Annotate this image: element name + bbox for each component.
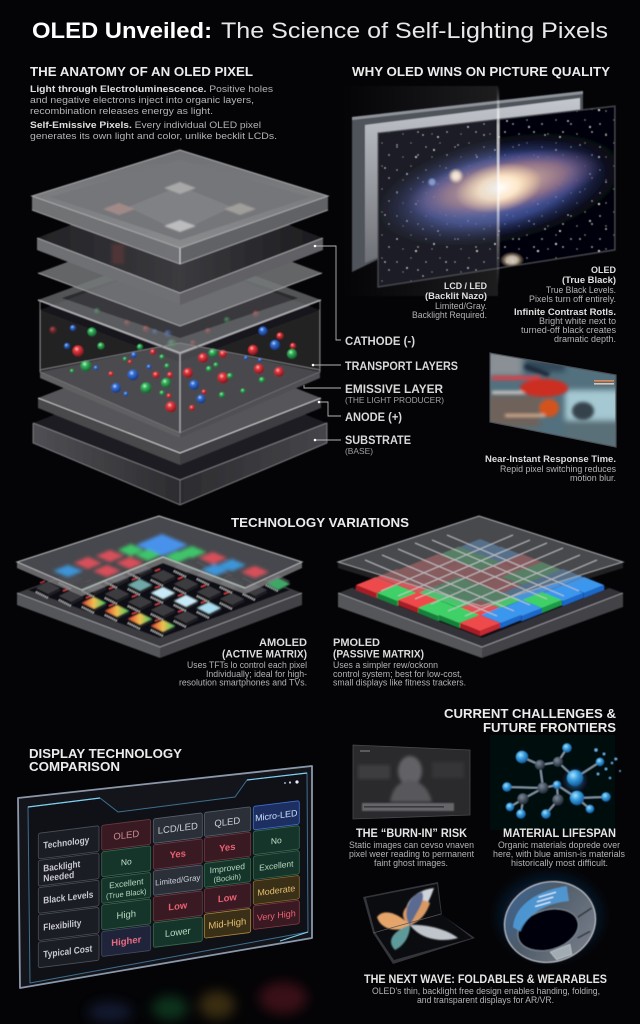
text block: OLED true black: turned-off black creates (521, 325, 616, 335)
text block: LCD / LED: Limited/Gray. (435, 301, 487, 311)
layer: anode (38, 343, 321, 465)
text block: OLED true black: OLED (591, 265, 616, 276)
column OLED: No (121, 856, 132, 867)
column OLED: Higher (111, 934, 142, 949)
back LCD frame (352, 91, 583, 272)
diagram: OLED pixel layer stack (32, 150, 328, 505)
text block: AMOLED: Individually; ideal for high- (206, 669, 307, 679)
PMOLED pixel grid (356, 539, 604, 636)
text block: material lifespan: historically most difficult. (511, 858, 608, 868)
diagram: AMOLED stack (17, 516, 302, 658)
text block: anatomy description: and negative electrons inject into organic layers, (30, 95, 254, 105)
text block: anatomy description: recombination releases energy as light. (30, 106, 213, 116)
column OLED: (True Black) (106, 887, 147, 901)
text block: OLED true black (514, 265, 616, 344)
text block: LCD / LED: (Backlit Nazo) (425, 291, 487, 302)
layer: top glass encapsulation (32, 150, 328, 264)
heading: challenges: FUTURE FRONTIERS (483, 720, 616, 735)
row label text (43, 834, 93, 961)
panel: LCD vs OLED galaxy displays (340, 86, 632, 296)
image: molecule (490, 735, 621, 830)
text block: burn-in risk: pixel weer reading to permanent (349, 849, 474, 859)
title: The Science of Self-Lighting Pixels (221, 18, 608, 43)
column Micro-LED: Moderate (257, 883, 295, 898)
text block: AMOLED: resolution smartphones and TVs. (179, 678, 307, 688)
row label text: Technology (43, 835, 90, 852)
glass pixels (103, 182, 256, 232)
text block: burn-in risk: faint ghost images. (374, 858, 448, 868)
layer: substrate (33, 366, 327, 505)
diagram: PMOLED stack (338, 516, 623, 658)
column QLED: Yes (219, 842, 235, 855)
column LCD/LED: Yes (170, 848, 186, 861)
text block: material lifespan: MATERIAL LIFESPAN (503, 826, 616, 840)
PMOLED glass plate (338, 516, 623, 612)
text block: AMOLED (179, 637, 307, 688)
title (32, 18, 608, 43)
row label text: Backlight (43, 859, 81, 875)
layer: cathode (37, 183, 323, 305)
layer: transport (38, 220, 322, 326)
column OLED: OLED (113, 829, 139, 843)
text block: LCD / LED: Backlight Required. (412, 310, 487, 320)
layer labels (345, 334, 458, 456)
text block: LCD / LED: LCD / LED (444, 281, 487, 292)
text block: OLED true black: Bright white next to (539, 316, 616, 326)
column QLED: (Bockih) (214, 872, 242, 884)
image: burn-in screen (353, 745, 470, 819)
text block: OLED true black: True Black Levels. (546, 285, 616, 295)
text block: anatomy description: Light through Electroluminescence. Positive holes (30, 84, 274, 94)
heading: comparison (29, 746, 182, 774)
text block: material lifespan: Organic materials doprede over (498, 840, 620, 850)
text block: response time: Near-Instant Response Time. (485, 454, 616, 465)
text block: PMOLED: PMOLED (333, 637, 380, 649)
text block: PMOLED: small displays like fitness trackers. (333, 678, 466, 688)
text block: AMOLED: (ACTIVE MATRIX) (222, 648, 307, 660)
text block: response time (485, 454, 616, 483)
text block: OLED true black: Pixels turn off entirely. (529, 294, 616, 304)
column QLED: Improved (210, 861, 245, 875)
text block: burn-in risk: Static images can cevso vnaven (349, 840, 474, 850)
text block: response time: Repid pixel switching reduces (500, 464, 616, 474)
text block: PMOLED: (PASSIVE MATRIX) (333, 648, 424, 660)
heading: challenges: CURRENT CHALLENGES & (444, 706, 616, 721)
layer labels: SUBSTRATE (345, 433, 411, 447)
text block: material lifespan (493, 826, 625, 868)
column QLED: Low (218, 892, 237, 905)
column OLED: Excellent (109, 876, 144, 890)
row label text: Needed (43, 870, 74, 885)
text block: OLED true black: dramatic depth. (554, 334, 616, 344)
text block: AMOLED: AMOLED (259, 637, 307, 649)
layer labels: CATHODE (-) (345, 334, 415, 348)
column LCD/LED: LCD/LED (158, 821, 198, 837)
heading: comparison: COMPARISON (29, 759, 120, 774)
text block: next wave: THE NEXT WAVE: FOLDABLES & WEARABLES (364, 972, 607, 986)
column Micro-LED: Very High (257, 908, 296, 923)
PMOLED row and column electrodes (365, 535, 597, 616)
text block: OLED true black: (True Black) (562, 275, 616, 286)
text block: anatomy description: generates its own light and color, unlike becklit LCDs. (30, 131, 277, 141)
row label text: Black Levels (43, 889, 93, 907)
text block: PMOLED: control system; best for low-cost, (333, 669, 462, 679)
front display galaxy (378, 106, 615, 286)
column LCD/LED: Lower (165, 926, 192, 940)
heading: anatomy: THE ANATOMY OF AN OLED PIXEL (30, 64, 253, 79)
text block: burn-in risk (349, 826, 474, 868)
row labels (38, 826, 99, 968)
AMOLED transistor chips (36, 551, 290, 636)
layer labels: EMISSIVE LAYER (345, 382, 443, 396)
layer labels: (THE LIGHT PRODUCER) (345, 396, 444, 405)
text block: burn-in risk: THE “BURN-IN” RISK (356, 826, 467, 840)
text block: PMOLED (333, 637, 466, 688)
text block: anatomy description: Self-Emissive Pixels. Every individual OLED pixel (30, 120, 261, 130)
layer labels: TRANSPORT LAYERS (345, 359, 458, 373)
column QLED (204, 807, 251, 938)
layer: emissive glass box (38, 248, 321, 438)
glass frame (18, 766, 312, 988)
column Micro-LED: Micro-LED (255, 808, 298, 823)
table cells (38, 801, 299, 968)
text block: next wave: OLED's thin, backlight free design enables handing, folding, (372, 986, 600, 996)
text block: response time: motion blur. (570, 473, 616, 483)
title: OLED Unveiled: (32, 18, 212, 43)
text block: next wave: and transparent displays for AR/VR. (417, 995, 554, 1005)
text block: anatomy description (30, 84, 277, 141)
column QLED: Mid-High (208, 916, 246, 932)
row label text: Typical Cost (43, 943, 93, 961)
AMOLED glass plate with pixels (17, 516, 302, 596)
column LCD/LED: Limited/Gray (155, 873, 200, 888)
column LCD/LED (153, 813, 202, 947)
layer labels: (BASE) (345, 447, 373, 456)
AMOLED tray (17, 540, 302, 658)
heading: challenges (444, 706, 616, 735)
column LCD/LED: Low (168, 900, 188, 914)
text block: PMOLED: Uses a simpler rew/ockonn (333, 660, 438, 670)
PMOLED tray (338, 540, 623, 658)
heading: comparison: DISPLAY TECHNOLOGY (29, 746, 182, 761)
icon: foldable phone (363, 882, 475, 964)
column OLED: High (117, 909, 136, 922)
layer labels: ANODE (+) (345, 410, 402, 424)
text block: next wave (364, 972, 607, 1005)
text block: OLED true black: Infinite Contrast Rotls. (514, 307, 616, 318)
text block: AMOLED: Uses TFTs lo control each pixel (187, 660, 307, 670)
leader lines (304, 245, 341, 441)
text block: LCD / LED (412, 281, 487, 320)
row label text: Flexibility (43, 918, 82, 934)
image: motion blur race car (488, 352, 620, 450)
column OLED (102, 819, 151, 957)
column Micro-LED: No (271, 835, 282, 846)
icon: wearable band (495, 871, 605, 973)
heading: technology variations: TECHNOLOGY VARIATIONS (231, 515, 409, 530)
column QLED: QLED (214, 816, 240, 830)
column Micro-LED: Excellent (259, 858, 294, 873)
heading: picture quality: WHY OLED WINS ON PICTURE QUALITY (352, 64, 610, 79)
column Micro-LED (253, 801, 299, 930)
panel: comparison table (18, 766, 312, 988)
lit chip surfaces (82, 578, 290, 632)
text block: material lifespan: here, with blue amisn-is materials (493, 849, 625, 859)
panel reflection (88, 982, 307, 1022)
